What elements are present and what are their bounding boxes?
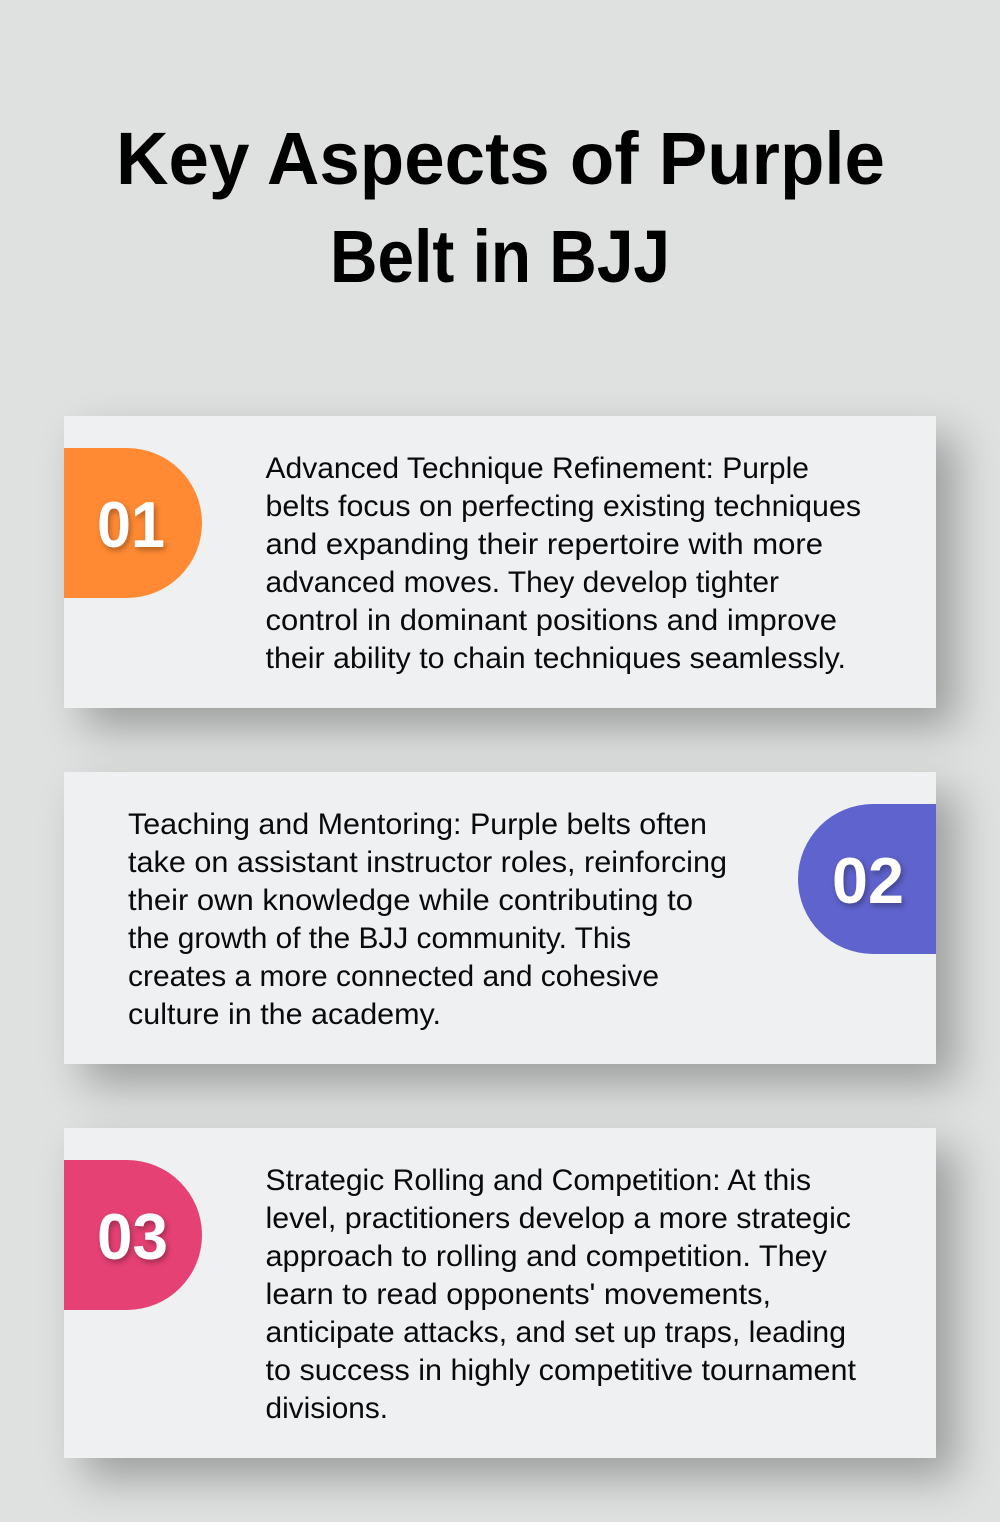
text block 2: Teaching and Mentoring: Purple belts often (128, 808, 707, 841)
text block 2: culture in the academy. (128, 998, 441, 1031)
text block 2: creates a more connected and cohesive (128, 960, 659, 993)
panel: strategic rolling and competition (64, 1128, 936, 1458)
panel: teaching and mentoring (64, 772, 936, 1064)
text block 1: and expanding their repertoire with more (266, 528, 823, 561)
badge: 03 (64, 1160, 202, 1310)
text block 3: level, practitioners develop a more strategic (266, 1202, 851, 1235)
text block 3: learn to read opponents' movements, (266, 1278, 771, 1311)
text block 2: take on assistant instructor roles, reinforcing (128, 846, 727, 879)
text block 1: control in dominant positions and improve (266, 604, 837, 637)
number 03: 03 (97, 1200, 168, 1273)
number 02: 02 (832, 844, 904, 917)
text block 2: their own knowledge while contributing to (128, 884, 693, 917)
text block 2: the growth of the BJJ community. This (128, 922, 631, 955)
badge: 01 (64, 448, 202, 598)
text block 3: divisions. (266, 1392, 388, 1425)
title (116, 117, 885, 298)
text block 3: anticipate attacks, and set up traps, leading (266, 1316, 846, 1349)
text block 3 (266, 1164, 857, 1425)
badge: 02 (798, 804, 936, 954)
text block 1: Advanced Technique Refinement: Purple (266, 452, 809, 485)
text block 1: their ability to chain techniques seamlessly. (266, 642, 846, 675)
panel: advanced technique refinement (64, 416, 936, 708)
number 01: 01 (97, 488, 165, 561)
title: Key Aspects of Purple (116, 117, 885, 200)
text block 1: advanced moves. They develop tighter (266, 566, 779, 599)
text block 3: to success in highly competitive tournament (266, 1354, 857, 1387)
text block 1 (266, 452, 861, 675)
text block 1: belts focus on perfecting existing techniques (266, 490, 861, 523)
text block 2 (128, 808, 727, 1031)
title: Belt in BJJ (330, 215, 670, 298)
text block 3: Strategic Rolling and Competition: At this (266, 1164, 811, 1197)
text block 3: approach to rolling and competition. They (266, 1240, 827, 1273)
